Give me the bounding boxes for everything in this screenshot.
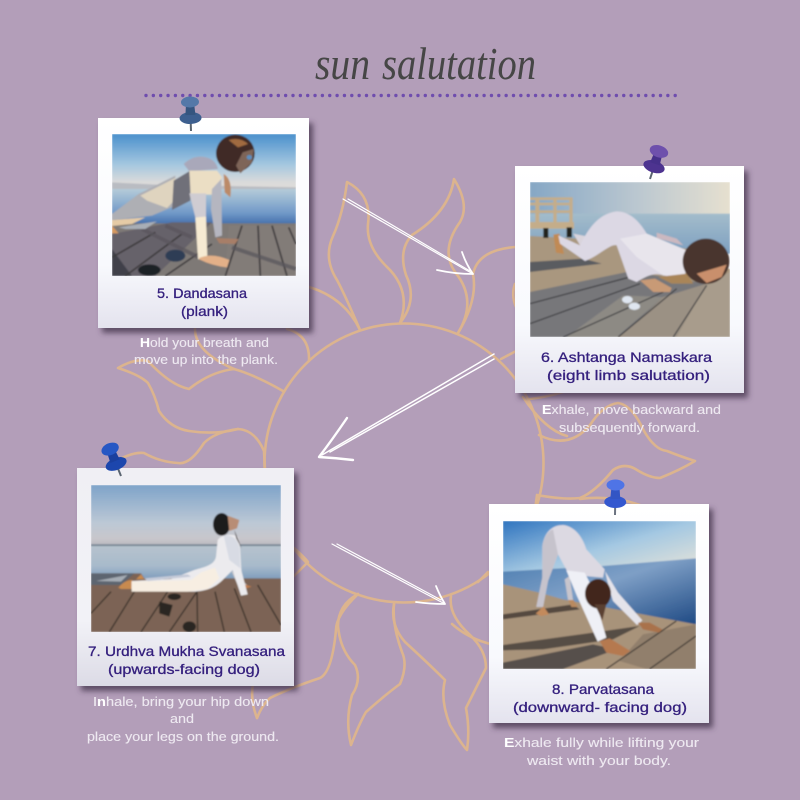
description: step 8: waist with your body. — [526, 754, 671, 768]
panel: step 6 Ashtanga Namaskara — [515, 166, 744, 393]
caption — [88, 643, 285, 677]
title: sun — [315, 38, 370, 89]
panel: step 8 Parvatasana — [489, 504, 709, 723]
panel: step 7 Urdhva Mukha Svanasana — [77, 468, 294, 686]
description: step 7 — [87, 695, 279, 744]
caption — [513, 681, 687, 715]
description: step 8 — [504, 736, 699, 768]
panel: step 5 Dandasana — [98, 118, 309, 328]
belly — [172, 171, 190, 210]
arrow: step 5 to step 6 — [343, 199, 473, 274]
card frame — [489, 504, 709, 723]
sun outline illustration — [118, 179, 695, 750]
photo: downward-facing dog — [503, 521, 696, 669]
caption: 7. Urdhva Mukha Svanasana — [88, 643, 285, 659]
description: step 7: and — [170, 712, 194, 726]
caption: (eight limb salutation) — [547, 367, 710, 383]
icon: push pin step 6 — [640, 142, 671, 182]
caption: 5. Dandasana — [157, 285, 247, 301]
description: step 8: Exhale fully while lifting your — [504, 736, 699, 750]
description: step 6: subsequently forward. — [559, 421, 700, 435]
caption: (upwards-facing dog) — [108, 661, 260, 677]
caption: 6. Ashtanga Namaskara — [541, 349, 712, 365]
photo: plank pose — [112, 134, 296, 276]
description: step 5: Hold your breath and — [140, 336, 269, 350]
legs — [112, 176, 175, 220]
description: step 6 — [542, 403, 721, 435]
arms — [189, 193, 206, 217]
icon: push pin step 5 — [179, 96, 202, 131]
photo: eight limb pose — [530, 182, 730, 337]
title: salutation — [382, 38, 536, 89]
head — [216, 135, 255, 172]
description: step 7: Inhale, bring your hip down — [93, 695, 269, 709]
description: step 6: Exhale, move backward and — [542, 403, 721, 417]
card frame — [515, 166, 744, 393]
dotted divider — [146, 94, 681, 97]
caption — [157, 285, 247, 319]
caption: (downward- facing dog) — [513, 699, 687, 715]
card frame — [77, 468, 294, 686]
description: step 5 — [134, 336, 278, 367]
arrow: step 7 to step 8 — [332, 544, 445, 604]
description: step 7: place your legs on the ground. — [87, 730, 279, 744]
photo: upward-facing dog — [91, 485, 281, 632]
caption: 8. Parvatasana — [552, 681, 654, 697]
icon: push pin step 8 — [604, 479, 627, 515]
description: step 5: move up into the plank. — [134, 353, 278, 367]
caption — [541, 349, 712, 383]
card frame — [98, 118, 309, 328]
arrow: step 6 to step 7 — [319, 354, 494, 460]
caption: (plank) — [181, 303, 228, 319]
icon: push pin step 7 — [98, 439, 131, 480]
title — [315, 38, 536, 89]
torso — [184, 157, 218, 171]
